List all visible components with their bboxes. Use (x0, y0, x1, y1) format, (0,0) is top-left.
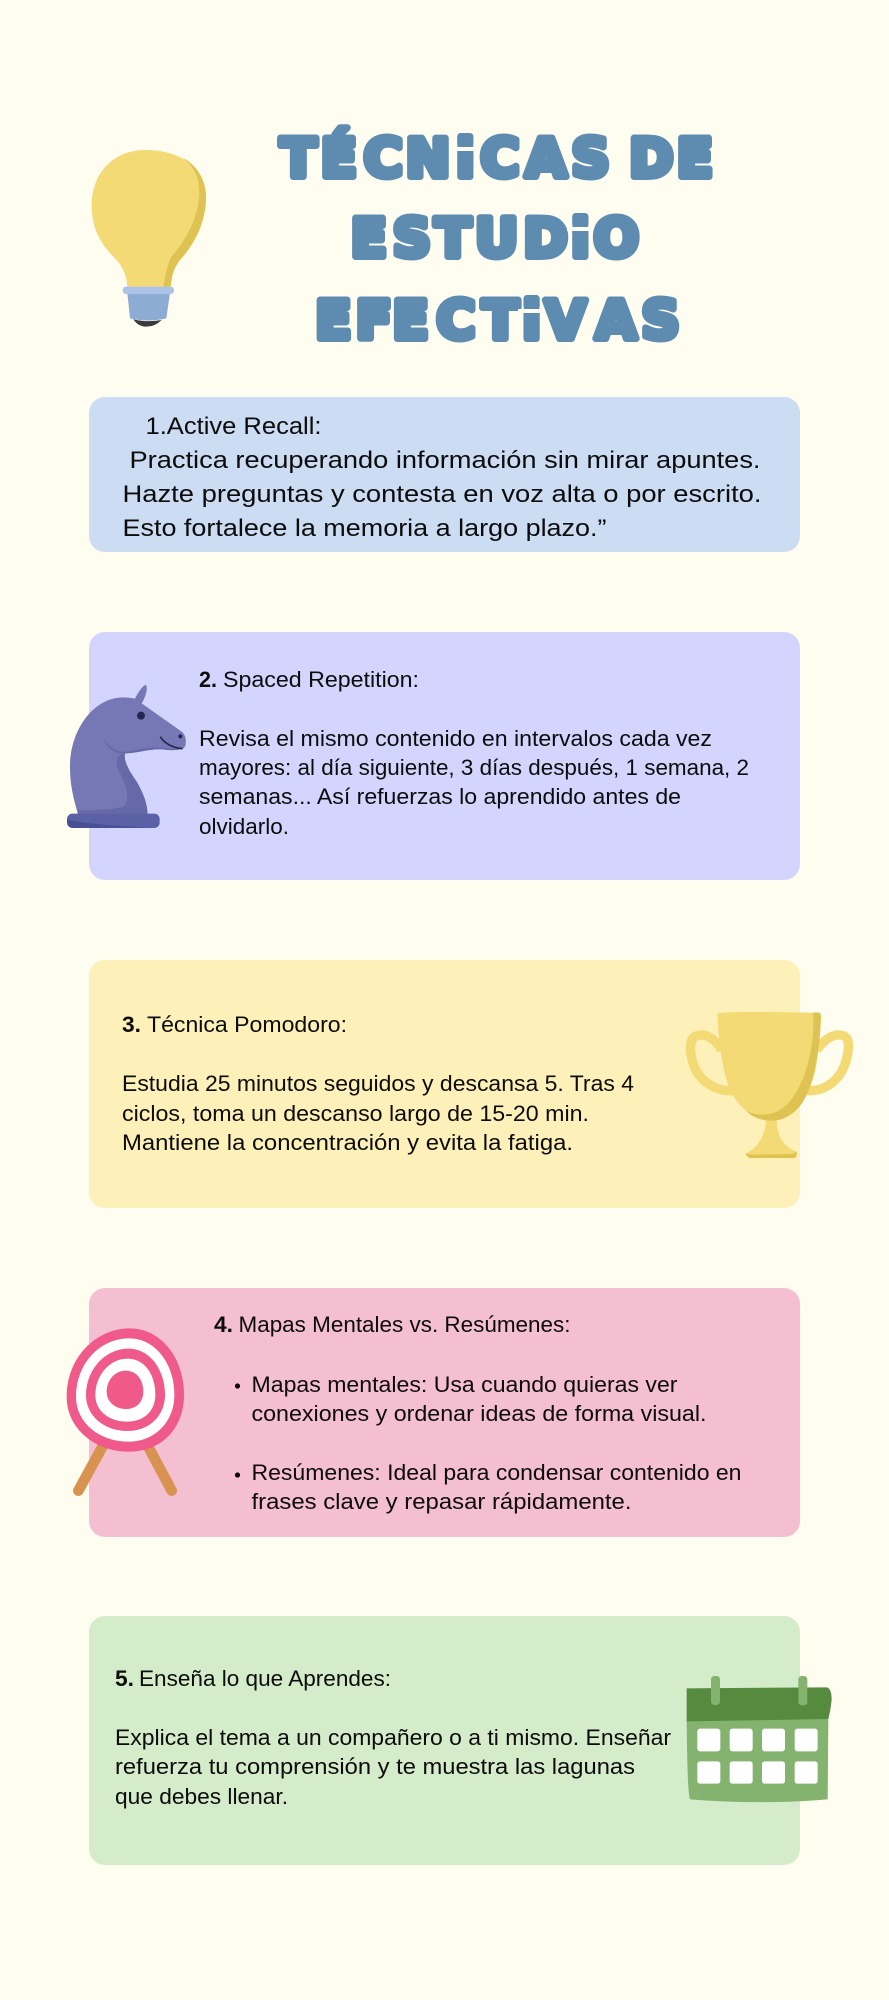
icon: chess knight (67, 685, 186, 828)
heading: ensena lo que aprendes: Enseña lo que Aprendes: (139, 1666, 391, 1691)
heading: tecnica pomodoro: Técnica Pomodoro: (147, 1012, 347, 1037)
body text: active recall (122, 447, 762, 542)
title (280, 126, 713, 352)
heading: active recall: 1.Active Recall: (146, 413, 322, 440)
bullet: mapas mentales: conexiones y ordenar ideas de forma visual. (252, 1401, 706, 1426)
body text: active recall: Hazte preguntas y contesta en voz alta o por escrito. (122, 481, 762, 508)
body text: ensena lo que aprendes: Explica el tema a un compañero o a ti mismo. Enseñar (115, 1725, 671, 1750)
panel: ensena lo que aprendes (89, 1616, 832, 1865)
body text: active recall: Esto fortalece la memoria a largo plazo.” (122, 515, 606, 542)
heading: mapas mentales vs resumenes: Mapas Mentales vs. Resúmenes: (238, 1312, 570, 1337)
title: TÉCNiCAS DE (280, 126, 713, 190)
body text: spaced repetition: olvidarlo. (199, 814, 289, 839)
heading: ensena lo que aprendes: 5. (115, 1666, 134, 1691)
bullet: resumenes: frases clave y repasar rápidamente. (252, 1489, 632, 1514)
panel: tecnica pomodoro (89, 960, 848, 1208)
icon: calendar (687, 1676, 832, 1802)
icon: light bulb (92, 150, 206, 327)
heading: mapas mentales vs resumenes: 4. (214, 1312, 233, 1337)
body text: ensena lo que aprendes (115, 1725, 671, 1809)
body text: ensena lo que aprendes: que debes llenar. (115, 1784, 288, 1809)
icon: target (67, 1328, 184, 1491)
body text: spaced repetition (199, 726, 749, 839)
bullet: mapas mentales (235, 1372, 706, 1426)
icon: trophy (691, 1012, 848, 1158)
body text: ensena lo que aprendes: refuerza tu comprensión y te muestra las lagunas (115, 1754, 635, 1779)
bullet: mapas mentales: Mapas mentales: Usa cuando quieras ver (252, 1372, 678, 1397)
body text: active recall: Practica recuperando información sin mirar apuntes. (130, 447, 760, 474)
body text: spaced repetition: semanas... Así refuerzas lo aprendido antes de (199, 784, 681, 809)
heading: spaced repetition: Spaced Repetition: (223, 667, 419, 692)
panel: active recall (89, 397, 800, 552)
body text: spaced repetition: Revisa el mismo contenido en intervalos cada vez (199, 726, 712, 751)
panel: mapas mentales vs resumenes (67, 1288, 800, 1537)
title: EFECTiVAS (315, 290, 680, 352)
bullet: resumenes (235, 1460, 742, 1514)
body text: spaced repetition: mayores: al día siguiente, 3 días después, 1 semana, 2 (199, 755, 749, 780)
heading: spaced repetition: 2. (199, 667, 217, 692)
body text: tecnica pomodoro (122, 1071, 634, 1155)
body text: tecnica pomodoro: Mantiene la concentración y evita la fatiga. (122, 1130, 573, 1155)
panel: spaced repetition (67, 632, 800, 880)
bullet: resumenes: Resúmenes: Ideal para condensar contenido en (252, 1460, 742, 1485)
body text: tecnica pomodoro: ciclos, toma un descanso largo de 15-20 min. (122, 1101, 589, 1126)
title: ESTUDiO (351, 208, 639, 270)
body text: tecnica pomodoro: Estudia 25 minutos seguidos y descansa 5. Tras 4 (122, 1071, 634, 1096)
heading: tecnica pomodoro: 3. (122, 1012, 141, 1037)
